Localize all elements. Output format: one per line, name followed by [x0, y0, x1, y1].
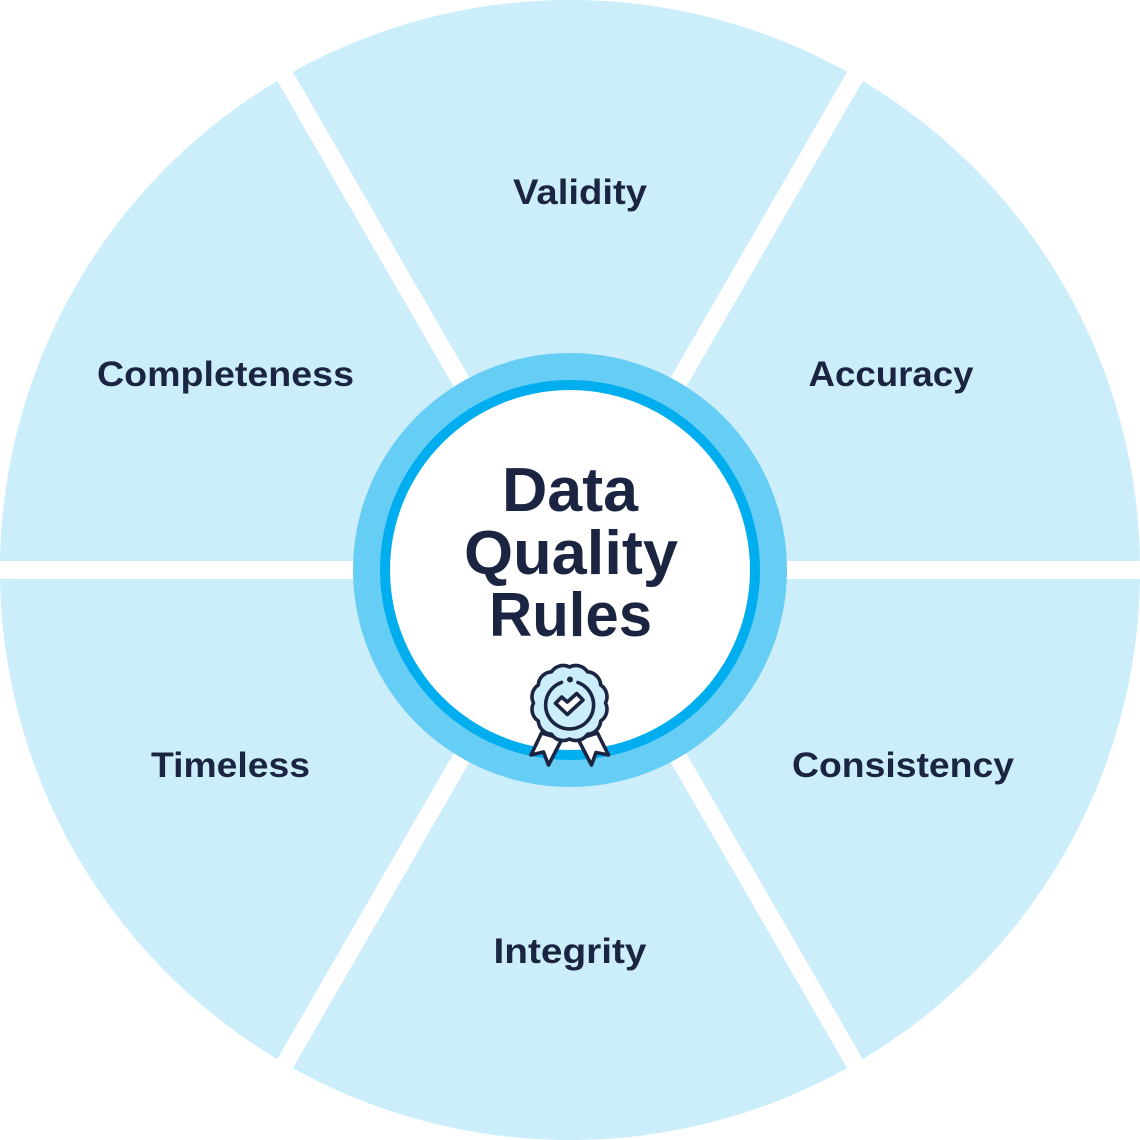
outer ring [353, 353, 787, 787]
label: Validity: Validity [513, 173, 648, 212]
right ribbon [578, 733, 608, 765]
scalloped seal [532, 665, 607, 741]
seal dot [569, 678, 571, 681]
title: Data Quality Rules: Data [502, 456, 639, 525]
title: Data Quality Rules [464, 456, 679, 650]
label: Accuracy: Accuracy [808, 355, 974, 394]
label: Integrity: Integrity [494, 932, 647, 971]
seal inner ring [546, 682, 594, 729]
left ribbon [531, 733, 562, 765]
segment: validity [293, 0, 847, 552]
inner ring [380, 380, 760, 760]
title: Data Quality Rules: Rules [489, 581, 652, 650]
center hub [353, 353, 787, 787]
segment: timeless [0, 339, 693, 1095]
segment: accuracy [447, 45, 1140, 801]
check mark [556, 694, 583, 714]
icon: award badge with check mark [531, 665, 608, 765]
label: Completeness: Completeness [97, 355, 354, 394]
title: Data Quality Rules: Quality [464, 519, 679, 588]
label: Timeless: Timeless [151, 746, 310, 785]
segment: consistency [447, 339, 1140, 1095]
hub disc [390, 390, 750, 750]
segment: completeness [0, 45, 693, 801]
segment: integrity [293, 588, 847, 1140]
label: Consistency: Consistency [792, 746, 1015, 785]
